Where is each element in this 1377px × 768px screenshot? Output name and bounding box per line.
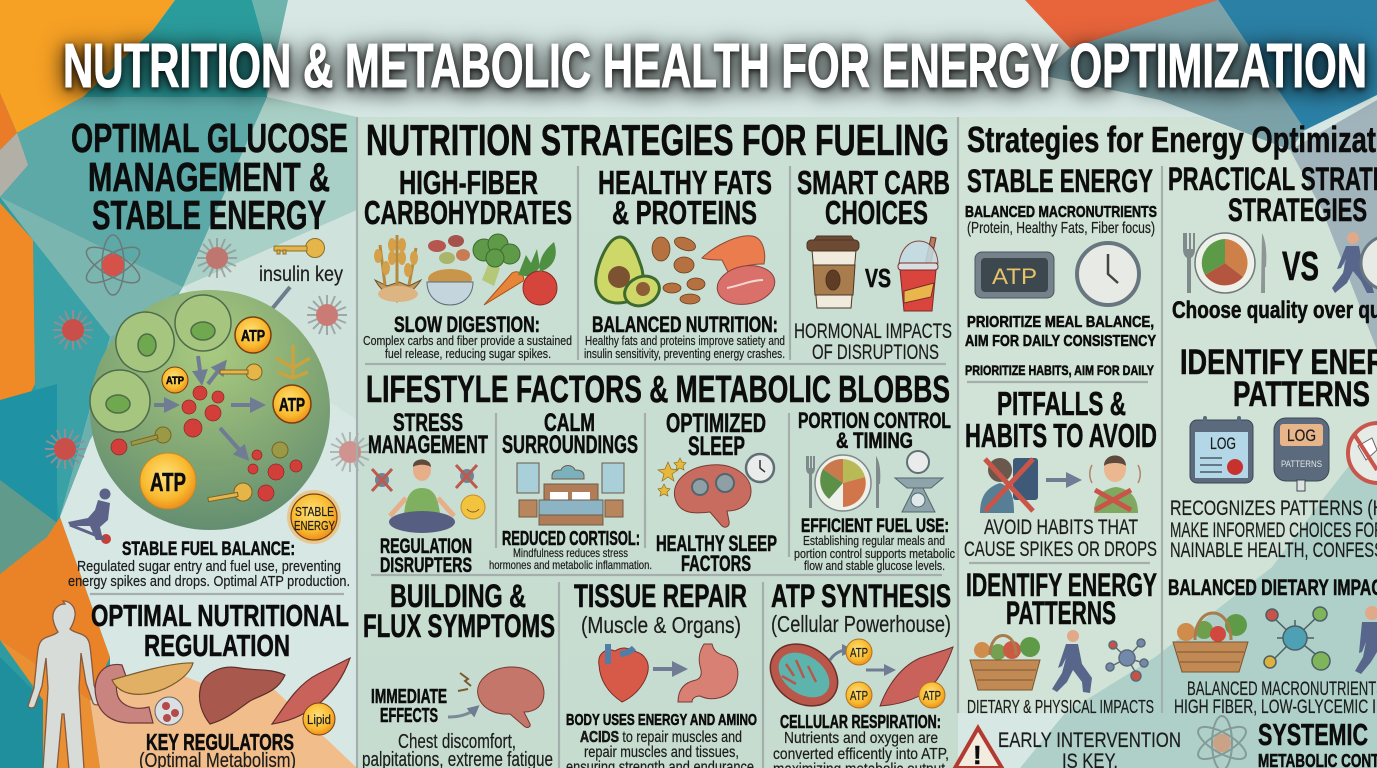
text: key regulators bbox=[139, 729, 296, 768]
badge: ATP right: ATP bbox=[279, 395, 305, 415]
icon: mitochondrion bbox=[758, 631, 850, 719]
icon: liver bbox=[199, 667, 285, 724]
arrows bbox=[830, 650, 890, 670]
sub-panel: healthy fats and proteins: HEALTHY FATS bbox=[598, 164, 772, 201]
text: cellular respiration: CELLULAR RESPIRATION: bbox=[780, 712, 941, 732]
icon: walker bbox=[1052, 630, 1092, 693]
heading: tissue repair bbox=[574, 578, 747, 638]
sub-panel: stable energy: PRIORITIZE MEAL BALANCE, bbox=[967, 314, 1154, 331]
sub-panel: identify energy patterns bbox=[966, 567, 1157, 717]
sub-panel: identify energy patterns: PATTERNS bbox=[1006, 595, 1116, 631]
icon: glucose meter: LOG bbox=[1287, 426, 1316, 445]
sub-panel: stress management bbox=[368, 409, 488, 577]
icon: beans and lentil bowl bbox=[427, 235, 473, 305]
sub-panel: calm surroundings: Mindfulness reduces stress bbox=[513, 546, 628, 560]
text: body uses energy: repair muscles and tissues, bbox=[584, 744, 739, 761]
icon: walker partial bbox=[1355, 606, 1377, 674]
panel: right column background bbox=[958, 117, 1377, 713]
text: slow digestion: fuel release, reducing sugar spikes. bbox=[385, 347, 551, 361]
text: systemic metabolic control bbox=[1258, 717, 1377, 768]
heading: identify energy patterns bbox=[1180, 343, 1377, 414]
heading: optimal nutritional regulation: OPTIMAL NUTRITIONAL bbox=[91, 598, 349, 633]
icon: cells bbox=[90, 295, 231, 432]
heading: atp synthesis bbox=[771, 578, 951, 637]
badge: ATP: ATP bbox=[850, 645, 868, 660]
sub-panel: calm surroundings: CALM bbox=[544, 409, 595, 437]
sub-panel: high-fiber carbohydrates: HIGH-FIBER bbox=[399, 164, 538, 201]
icon: glucose meter: PATTERNS bbox=[1281, 459, 1322, 469]
icon: plate with food bbox=[806, 455, 880, 511]
icon: wheat bbox=[374, 235, 421, 302]
text: balanced nutrition: BALANCED NUTRITION: bbox=[592, 312, 778, 337]
text: early intervention bbox=[998, 729, 1181, 768]
heading: lifestyle factors: LIFESTYLE FACTORS & METABOLIC BLOBBS bbox=[366, 369, 950, 411]
text: key regulators: KEY REGULATORS bbox=[146, 729, 294, 755]
icon: atom faint bbox=[1194, 716, 1250, 768]
panel: ATP synthesis bbox=[758, 578, 953, 768]
heading: optimal glucose: OPTIMAL GLUCOSE bbox=[71, 115, 348, 161]
text: early intervention: EARLY INTERVENTION bbox=[998, 729, 1181, 752]
sub-panel: smart carb choices: SMART CARB bbox=[797, 164, 950, 201]
icon: branch bbox=[276, 345, 310, 378]
icon: crossed person bbox=[1090, 456, 1140, 513]
icon: meditating person bbox=[389, 459, 455, 533]
heading: building flux bbox=[363, 578, 555, 644]
icon: plate bbox=[1183, 233, 1266, 293]
sub-panel: stable energy: BALANCED MACRONUTRIENTS bbox=[965, 204, 1157, 221]
icon: pathogens bbox=[45, 238, 370, 472]
heading: optimal glucose: STABLE ENERGY bbox=[92, 192, 326, 238]
icon: carrot bbox=[484, 249, 540, 305]
sub-panel: calm surroundings: SURROUNDINGS bbox=[502, 431, 638, 459]
icon: ATP display: ATP bbox=[992, 264, 1037, 289]
badge: ATP small bbox=[162, 367, 188, 393]
sub-panel: stable energy: AIM FOR DAILY CONSISTENCY bbox=[965, 333, 1156, 350]
text: hormonal impacts: OF DISRUPTIONS bbox=[812, 341, 939, 364]
text: stable fuel balance: Regulated sugar entry and fuel use, preventing bbox=[77, 558, 341, 575]
panel: practical strategies bbox=[1168, 161, 1377, 768]
sub-panel: high-fiber carbohydrates: CARBOHYDRATES bbox=[364, 194, 572, 231]
icon: avocado bbox=[596, 237, 664, 311]
icon: muscle bbox=[272, 658, 350, 724]
badge: ATP bbox=[235, 317, 271, 353]
icon: warning triangle bbox=[955, 728, 1002, 768]
icon: glucose meter bbox=[1274, 418, 1329, 491]
heading: tissue repair: (Muscle & Organs) bbox=[581, 612, 741, 638]
label: insulin key: insulin key bbox=[259, 263, 343, 286]
sub-panel: stable energy: STABLE ENERGY bbox=[967, 163, 1153, 199]
sub-panel: portion control: Establishing regular meals and bbox=[803, 533, 945, 548]
sub-panel: calm surroundings: hormones and metabolic inflammation. bbox=[489, 558, 652, 572]
sub-panel: stress management: REGULATION bbox=[380, 535, 472, 558]
sub-panel: calm surroundings: REDUCED CORTISOL: bbox=[502, 528, 640, 550]
sub-panel: portion control bbox=[794, 408, 955, 573]
sub-panel: portion control: PORTION CONTROL bbox=[798, 408, 951, 433]
sub-panel: optimized sleep: HEALTHY SLEEP bbox=[656, 531, 777, 556]
heading: nutrition strategies: NUTRITION STRATEGIES FOR FUELING bbox=[366, 116, 949, 165]
sub-panel: optimized sleep: FACTORS bbox=[681, 551, 751, 576]
panel: tissue repair bbox=[566, 578, 763, 768]
sub-panel: optimized sleep: SLEEP bbox=[688, 431, 745, 461]
sub-panel: identify energy patterns: DIETARY & PHYSICAL IMPACTS bbox=[967, 697, 1154, 717]
heading: building flux: BUILDING & bbox=[390, 578, 526, 614]
sub-panel: portion control: portion control supports metabolic bbox=[794, 546, 955, 561]
icon: crossed phone user bbox=[980, 458, 1038, 513]
heading: optimal nutritional regulation bbox=[91, 598, 349, 663]
icon: glucose dots bbox=[111, 386, 302, 501]
icon: heart bbox=[599, 644, 648, 702]
icon: prohibited sugar bbox=[1348, 423, 1377, 483]
badge: ATP right bbox=[273, 385, 311, 423]
heading: tissue repair: TISSUE REPAIR bbox=[574, 578, 747, 614]
badge: ATP bbox=[846, 682, 872, 708]
sub-panel: pitfalls and habits: HABITS TO AVOID bbox=[965, 417, 1157, 454]
icon: human body bbox=[28, 601, 100, 768]
text: slow digestion: Complex carbs and fiber provide a sustained bbox=[363, 334, 572, 348]
panel: middle column background bbox=[357, 117, 958, 768]
text: body uses energy: BODY USES ENERGY AND AMINO bbox=[566, 712, 757, 729]
text: chest discomfort bbox=[362, 731, 553, 768]
heading: atp synthesis: (Cellular Powerhouse) bbox=[771, 611, 951, 637]
sub-panel: healthy fats and proteins bbox=[596, 164, 778, 311]
sub-panel: stress management: STRESS bbox=[393, 409, 463, 437]
text: immediate effects: EFFECTS bbox=[380, 705, 438, 727]
badge: stable energy: ENERGY bbox=[294, 518, 335, 533]
sub-panel: smart carb choices bbox=[794, 164, 952, 364]
text: body uses energy: ACIDS to repair muscles and bbox=[580, 729, 742, 746]
icon: pancreas bbox=[95, 663, 193, 725]
text: stable fuel balance: energy spikes and drops. Optimal ATP production. bbox=[68, 573, 350, 590]
panel: building and flux symptoms bbox=[362, 578, 559, 768]
panel: optimal nutritional regulation bbox=[28, 598, 350, 768]
icon: stars bbox=[658, 458, 686, 496]
text: stable fuel balance bbox=[68, 539, 350, 590]
icon: smile bbox=[461, 495, 485, 519]
text: cellular respiration: Nutrients and oxygen are bbox=[784, 730, 938, 747]
badge: stable energy bbox=[287, 490, 341, 544]
sub-panel: portion control: & TIMING bbox=[836, 428, 913, 453]
icon: basket bbox=[970, 636, 1040, 690]
icon: clock bbox=[746, 454, 774, 482]
sub-panel: portion control: flow and stable glucose levels. bbox=[804, 558, 945, 573]
arrows bbox=[154, 356, 258, 455]
icon: steak bbox=[714, 261, 778, 309]
icon: log calendar bbox=[1190, 416, 1253, 483]
text: chest discomfort: Chest discomfort, bbox=[398, 731, 516, 753]
badge: ATP: ATP bbox=[850, 688, 868, 703]
panel: nutrition strategies for fueling bbox=[363, 116, 952, 364]
text: cellular respiration: converted efficently into ATP, bbox=[773, 746, 949, 763]
icon: soda cup bbox=[898, 237, 938, 311]
icon: ATP display bbox=[975, 252, 1054, 298]
sub-panel: stable energy: PRIORITIZE HABITS, AIM FOR DAILY bbox=[965, 362, 1155, 378]
badge: stable energy: STABLE bbox=[295, 504, 334, 519]
badge: ATP: ATP bbox=[241, 328, 265, 345]
icon: sparks bbox=[458, 673, 471, 691]
heading: atp synthesis: ATP SYNTHESIS bbox=[771, 578, 951, 614]
heading: optimal glucose: MANAGEMENT & bbox=[88, 154, 330, 200]
icon: bedroom bbox=[517, 463, 624, 525]
text: vs: VS bbox=[865, 263, 891, 293]
arrow bbox=[448, 709, 475, 717]
sub-panel: optimized sleep: OPTIMIZED bbox=[666, 408, 766, 438]
sub-panel: portion control: EFFICIENT FUEL USE: bbox=[801, 516, 949, 537]
icon: keys bbox=[131, 364, 288, 502]
badge: ATP large: ATP bbox=[150, 467, 186, 497]
sub-panel: calm surroundings bbox=[489, 409, 652, 572]
text: recognizes patterns bbox=[1170, 497, 1377, 562]
text: slow digestion bbox=[363, 312, 572, 361]
badge: ATP large bbox=[140, 453, 196, 509]
icon: broccoli bbox=[473, 234, 520, 286]
diagram: cell metabolism circle bbox=[90, 290, 330, 530]
text: slow digestion: SLOW DIGESTION: bbox=[394, 312, 540, 337]
text: immediate effects: IMMEDIATE bbox=[371, 686, 447, 708]
icon: clock partial bbox=[1361, 236, 1377, 290]
sub-panel: high-fiber carbohydrates bbox=[364, 164, 572, 305]
panel: optimal glucose management bbox=[45, 115, 370, 590]
sub-panel: pitfalls and habits: AVOID HABITS THAT bbox=[984, 516, 1138, 539]
text: balanced nutrition bbox=[584, 312, 785, 361]
text: stable fuel balance: STABLE FUEL BALANCE: bbox=[122, 539, 295, 560]
sub-panel: pitfalls and habits bbox=[964, 385, 1157, 561]
badge: lipid: Lipid bbox=[307, 712, 331, 727]
icon: muscle bbox=[880, 647, 953, 706]
sub-panel: stress management: MANAGEMENT bbox=[368, 431, 488, 459]
heading: building flux: FLUX SYMPTOMS bbox=[363, 608, 555, 644]
sub-panel: identify energy patterns: IDENTIFY ENERGY bbox=[966, 567, 1157, 603]
heading: optimal glucose bbox=[71, 115, 348, 238]
text: balanced nutrition: Healthy fats and proteins improve satiety and bbox=[585, 334, 785, 348]
icon: walker bbox=[1332, 232, 1374, 293]
badge: ATP small: ATP bbox=[166, 375, 184, 387]
icon: crossed molecules bbox=[372, 465, 477, 491]
icon: salmon bbox=[702, 236, 765, 272]
sub-panel: optimized sleep bbox=[656, 408, 777, 576]
icon: stomach bbox=[678, 644, 738, 702]
icon: coffee cup bbox=[807, 236, 859, 308]
sub-panel: pitfalls and habits: PITFALLS & bbox=[997, 385, 1126, 422]
icon: molecule bbox=[1264, 607, 1330, 670]
icon: atom bbox=[82, 235, 144, 295]
sub-panel: healthy fats and proteins: & PROTEINS bbox=[612, 194, 757, 231]
text: hormonal impacts bbox=[794, 320, 952, 364]
icon: log calendar: LOG bbox=[1210, 434, 1236, 453]
text: balanced macronutrients bbox=[1174, 679, 1377, 718]
heading: optimal nutritional regulation: REGULATION bbox=[144, 628, 290, 663]
badge: lipid bbox=[303, 703, 335, 735]
arrow bbox=[1046, 478, 1074, 482]
sub-panel: stable energy bbox=[965, 163, 1157, 378]
icon: brain bbox=[478, 667, 544, 727]
icon: runner bbox=[68, 488, 111, 544]
badge: ATP: ATP bbox=[923, 688, 941, 703]
badge: ATP bbox=[846, 639, 872, 665]
icon: brain with gears bbox=[674, 465, 751, 527]
icon: basket bbox=[1173, 613, 1248, 672]
icon: clock bbox=[1077, 243, 1139, 305]
icon: scale and timer bbox=[895, 451, 943, 512]
sub-panel: stable energy: (Protein, Healthy Fats, Fiber focus) bbox=[967, 220, 1155, 237]
icon: molecule bbox=[1106, 639, 1148, 681]
sub-panel: stress management: DISRUPTERS bbox=[380, 554, 472, 577]
pointer line bbox=[267, 287, 290, 315]
icon: nuts bbox=[652, 235, 705, 304]
panel: strategies for energy optimization bbox=[955, 119, 1377, 768]
sub-panel: smart carb choices: CHOICES bbox=[825, 194, 928, 231]
icon: apple bbox=[523, 242, 557, 305]
icon: insulin key bbox=[274, 238, 324, 258]
text: hormonal impacts: HORMONAL IMPACTS bbox=[794, 320, 952, 343]
text: cellular respiration bbox=[773, 712, 949, 768]
text: vs: VS bbox=[1282, 243, 1319, 289]
text: balanced nutrition: insulin sensitivity, preventing energy crashes. bbox=[584, 347, 785, 361]
panel: lifestyle factors bbox=[366, 369, 955, 577]
arrow bbox=[653, 667, 680, 671]
badge: ATP bbox=[919, 682, 945, 708]
sub-panel: pitfalls and habits: CAUSE SPIKES OR DROPS bbox=[964, 538, 1157, 561]
text: body uses energy bbox=[566, 712, 757, 768]
text: immediate effects bbox=[371, 686, 447, 727]
